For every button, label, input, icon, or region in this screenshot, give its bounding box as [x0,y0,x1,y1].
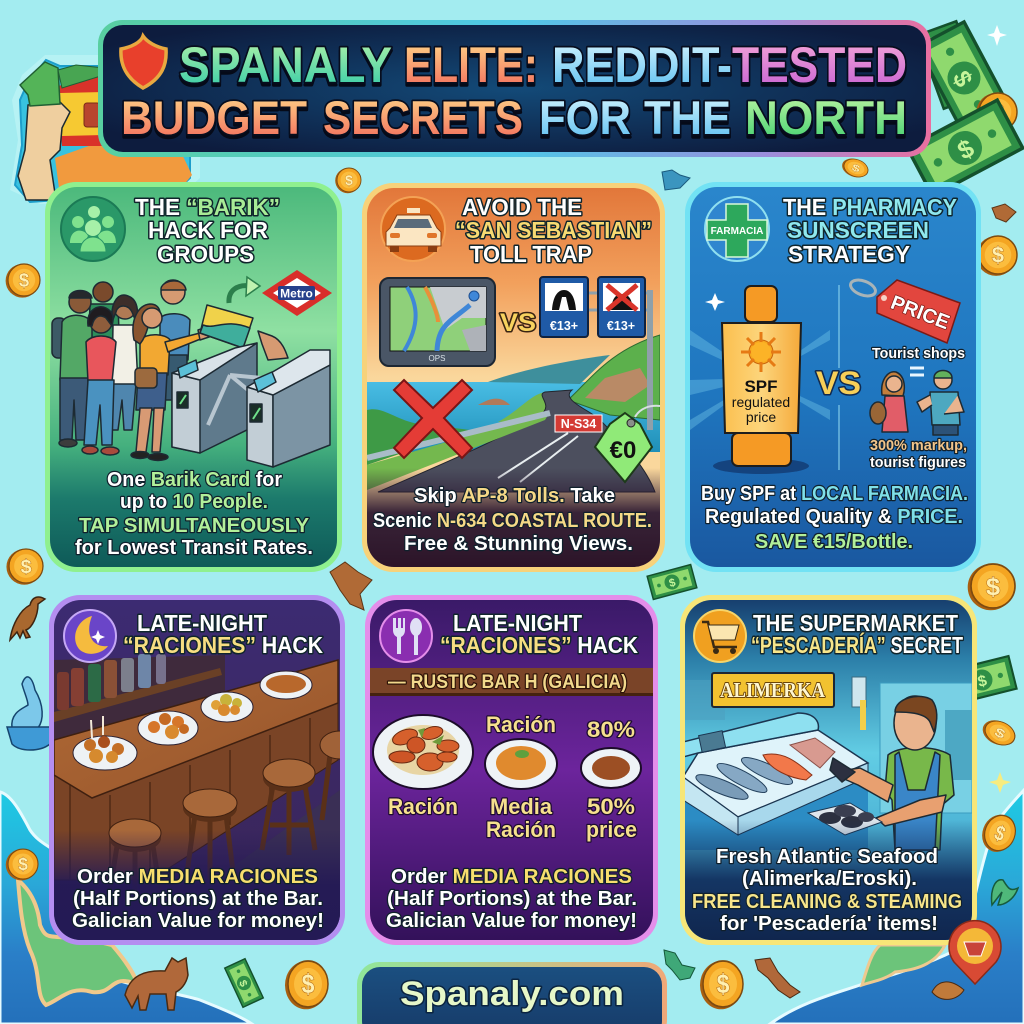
sign pole [647,290,653,430]
water: bottom left coast [0,792,252,1024]
road sign N-S34 [555,415,602,432]
coin: right middle [968,564,1015,610]
title line 2: FOR [539,91,631,144]
panel: raciones price comparison [365,595,658,945]
caption: Galician Value for money! [72,910,324,932]
price tag €0: €0 [610,437,636,464]
arrowhead [246,277,260,296]
arrow: to metro [229,286,250,303]
scale display [699,731,726,752]
title line 1: ELITE: [404,37,538,93]
sunscreen bottle: price [746,409,776,425]
coin: left bottom [6,849,38,880]
red X [394,380,472,458]
small island [478,399,510,405]
guard rail [367,413,550,458]
caption: for 'Pescadería' items! [720,913,938,935]
meat tray [790,738,835,768]
blue map fragment [662,170,690,190]
fade band [367,468,660,567]
heading: TOLL TRAP [470,241,592,267]
icon: transit card [200,305,253,348]
doorway [880,683,972,813]
plate: small [581,748,641,788]
toll sign: AP-8 [540,277,588,337]
VS: VS [500,309,536,337]
icon: pharmacy cross [705,197,769,261]
coin: right upper [976,236,1017,276]
shelf [945,710,972,780]
hand tapping [258,331,288,360]
bar panels [70,718,310,880]
ALIMERKA sign [712,673,834,707]
markup note: 300% markup, [870,437,967,454]
panel: raciones at the bar [49,595,360,945]
green map fragment [664,950,695,980]
stool 4 [320,731,360,820]
sparkle [705,293,725,311]
scene: group at metro gates [52,270,332,467]
plate labels: price [586,817,637,842]
heading: “RACIONES” HACK [440,632,638,658]
heading: THE SUPERMARKET [753,610,958,636]
hanging tag [852,677,866,707]
shelf wall [54,655,225,740]
bill: bottom left [225,959,263,1007]
markup note [870,437,967,471]
caption: (Half Portions) at the Bar. [73,888,323,910]
tourist shops label: Tourist shops [872,345,965,362]
heading: SUNSCREEN [787,217,929,243]
price tag: PRICE [888,292,952,334]
panel: supermarket pescadería [680,595,977,945]
stool 2 [183,789,237,880]
caption [386,866,637,932]
map of Spain and Portugal [10,55,200,204]
coin: left lower [6,549,43,585]
brown map fragment: right [992,204,1016,222]
caption: FREE CLEANING & STEAMING [692,891,962,913]
coin: right small [979,715,1019,751]
coin: right low [977,810,1020,857]
caption: Regulated Quality & PRICE. [705,506,963,528]
bill: centre [647,565,697,599]
brown dog [125,958,188,1010]
title line 2: BUDGET [121,91,307,144]
lower counter [685,777,868,850]
caption: SAVE €15/Bottle. [755,531,913,553]
panel: Barik hack [45,182,342,572]
headland [498,392,546,422]
case front [738,763,868,835]
case interior [683,730,868,817]
GPS device [380,278,495,366]
leaf: bottom right [932,982,964,999]
caption: Order MEDIA RACIONES [391,866,632,888]
equals sign [910,368,924,375]
plate labels: Ración [486,817,556,842]
brown map fragment: bottom [755,958,800,998]
plate 1 [73,716,137,770]
markup note: tourist figures [870,454,966,471]
title line 2: NORTH [745,91,907,144]
case lid [683,713,818,757]
footer URL box [357,962,667,1024]
caption: Order MEDIA RACIONES [77,866,318,888]
sunscreen bottle [713,286,809,474]
panel: toll trap [362,183,665,572]
plate labels [388,712,637,842]
distant hill [488,355,610,384]
banner text: — RUSTIC BAR H (GALICIA) [388,672,627,693]
tourist woman [870,372,908,432]
price tag €0 [595,406,660,482]
title line 1: TESTED [732,37,907,93]
caption: (Half Portions) at the Bar. [387,888,637,910]
caption: Fresh Atlantic Seafood [716,846,938,868]
sunscreen bottle: SPF [744,377,778,396]
road [378,390,655,492]
floor [276,790,340,940]
caption: Scenic N-634 COASTAL ROUTE. [373,510,652,532]
sailboat [7,677,50,750]
left bushes [367,409,470,465]
caption: (Alimerka/Eroski). [742,868,917,890]
price tag [848,277,960,343]
road markings [498,433,578,482]
toll sign crossbars [588,293,650,310]
tray of mussels [808,803,882,835]
title banner [98,20,931,157]
sparkle: right [989,772,1011,793]
plate labels: Ración [486,712,556,737]
plate 4 [260,671,312,699]
footer URL box: Spanaly.com [400,975,624,1013]
coin: top right [839,155,871,181]
plate labels: 80% [587,717,635,742]
fade band [54,830,340,940]
light rays behind bottle [690,330,830,430]
caption: Skip AP-8 Tolls. Take [414,485,615,507]
Metro sign [262,270,332,316]
green sea leaf [992,880,1018,905]
GPS device: OPS [429,354,445,363]
verge [367,412,550,490]
VS: VS [816,365,861,401]
title line 2: SECRETS [323,91,523,144]
caption: Free & Stunning Views. [404,533,633,555]
scene: coastal road [367,290,660,567]
bottles [57,654,166,710]
title line 1: SPANALY [179,37,392,93]
panel: pharmacy sunscreen [685,182,981,572]
heading [751,610,963,658]
scene: fish counter [683,677,972,940]
plate labels: Media [490,794,553,819]
caption [72,866,324,932]
title line 2: THE [644,91,731,144]
coin: bottom left [285,961,328,1009]
plate labels: Ración [388,794,458,819]
coin: left upper [6,264,40,298]
icon: shield [121,36,166,88]
hanging marker [860,700,866,730]
road sign N-S34: N-S34 [561,417,596,431]
title line 1: REDDIT- [552,37,732,93]
caption: Buy SPF at LOCAL FARMACIA. [701,483,968,505]
heading: AVOID THE [462,194,582,220]
heading [455,194,652,267]
title line 2 [121,91,907,144]
toll sign: crossed out [598,277,645,337]
toll sign: AP-8: €13+ [550,319,578,333]
group of travellers [52,280,190,455]
caption [75,469,313,559]
money pile, top right [907,21,1023,196]
tripod barrier [208,375,262,425]
caption: up to 10 People. [120,491,268,513]
land: bottom right [862,945,945,985]
icon: group of people [61,197,125,261]
heading: STRATEGY [788,241,910,267]
wooden banner [370,668,653,696]
heading: LATE-NIGHT [137,610,267,636]
heading [123,610,323,658]
toll sign: crossed out: €13+ [607,319,635,333]
caption [692,846,962,935]
sea [367,382,660,452]
caption [701,483,968,553]
fishmonger [830,696,954,850]
cliff rock [585,368,650,402]
icon: moon [64,610,116,662]
heading: GROUPS [157,241,254,267]
case left [683,777,738,835]
fade band [685,820,972,940]
bar top [54,660,338,798]
plate labels: 50% [587,794,635,819]
icon: map pin with basket [949,921,1001,984]
sunscreen bottle: regulated [732,394,790,410]
icon: shopping cart [694,610,746,662]
tourist man [917,370,964,435]
heading: “SAN SEBASTIAN” [455,217,652,243]
scene: wooden bar [54,654,360,940]
brown animal map fragment [330,562,372,610]
heading: THE “BARIK” [135,194,280,220]
heading: “PESCADERÍA” SECRET [751,631,963,658]
heading: HACK FOR [148,217,268,243]
left turnstile [172,343,257,453]
salmon fillet [763,754,812,780]
land: bottom left [18,880,138,1005]
caption: for Lowest Transit Rates. [75,537,313,559]
traveller holding card [131,304,212,460]
plate 2 [138,711,198,745]
heading [135,194,280,267]
plate: media ración [485,739,557,789]
Spanish crest [84,103,100,127]
right turnstile [247,350,330,467]
caption: TAP SIMULTANEOUSLY [79,515,310,537]
water: bottom right coast [770,790,1024,1024]
icon: cutlery [380,610,432,662]
plate: ración [373,715,473,789]
fish [693,753,795,804]
stool 3 [262,759,315,855]
caption: One Barik Card for [107,469,282,491]
ALIMERKA sign: ALIMERKA [720,678,826,702]
heading [783,194,957,267]
heading: “RACIONES” HACK [123,632,323,658]
bill: right [947,656,1017,704]
back shelves [685,680,725,720]
heading: LATE-NIGHT [453,610,582,636]
bird [10,597,45,640]
icon: pharmacy cross: FARMACIA [711,226,763,237]
green cliff [568,335,660,420]
heading [440,610,638,658]
heading: THE PHARMACY [783,194,957,220]
Metro sign: Metro [280,286,313,300]
coin: bottom right [700,961,743,1009]
icon: car [381,197,445,261]
divider [838,285,840,470]
bar front [54,703,338,880]
plate 3 [201,692,253,722]
stool 1 [109,819,161,890]
shelf board [54,668,222,722]
coin: top centre [335,168,361,193]
caption [373,485,652,555]
sparkle [987,25,1007,46]
title line 1 [179,37,907,93]
caption: Galician Value for money! [386,910,637,932]
